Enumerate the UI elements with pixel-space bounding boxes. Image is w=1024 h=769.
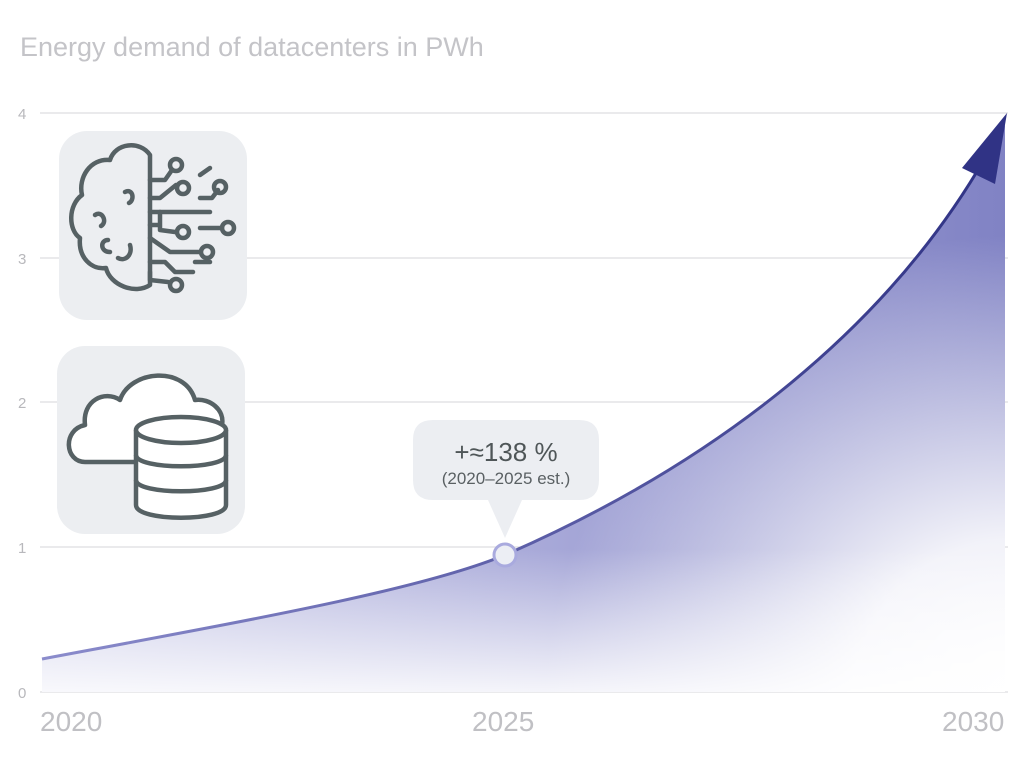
y axis labels: 0 (18, 685, 26, 702)
y axis labels: 4 (18, 106, 26, 123)
x axis labels: 2020 (40, 706, 102, 737)
callout: +≈138 % (454, 437, 558, 467)
title: Energy demand of datacenters in PWh (20, 32, 484, 62)
y axis labels: 3 (18, 251, 26, 268)
x axis labels: 2025 (472, 706, 534, 737)
marker 2025 (494, 544, 516, 566)
area fill (40, 110, 1010, 695)
curve (42, 158, 985, 659)
y axis labels: 2 (18, 395, 26, 412)
y axis labels: 1 (18, 540, 26, 557)
arrowhead (962, 113, 1007, 184)
icon: AI brain (59, 131, 247, 320)
x axis labels (40, 706, 1004, 737)
y axis labels (18, 106, 26, 702)
callout: (2020–2025 est.) (442, 469, 570, 488)
x axis labels: 2030 (942, 706, 1004, 737)
callout (413, 420, 599, 538)
icon: cloud database (57, 346, 245, 534)
grid lines (40, 113, 1008, 692)
